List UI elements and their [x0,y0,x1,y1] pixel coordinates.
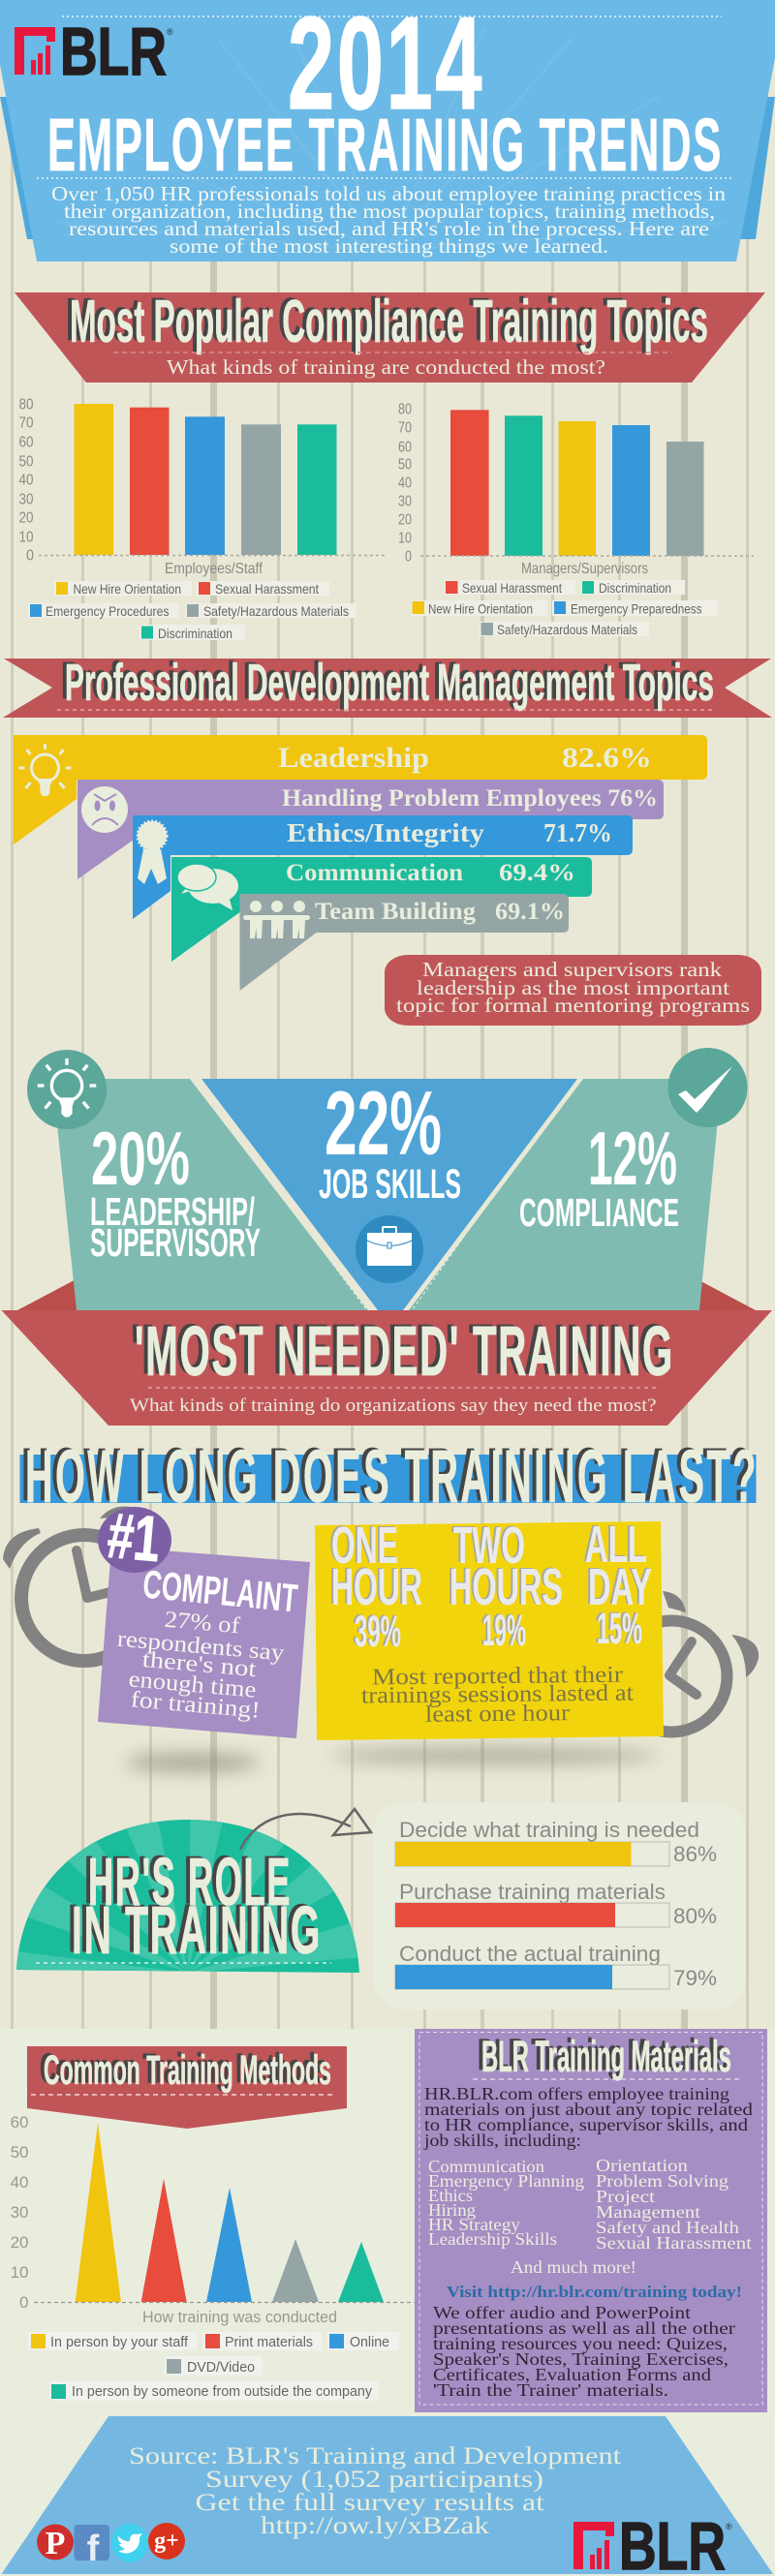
source text: Get the full survey results at [196,2490,544,2516]
legend: Print materials [225,2334,313,2350]
durations: DAY [588,1558,652,1616]
intro paragraph: some of the most interesting things we learned. [170,234,608,258]
chart: common training methods: 40 [11,2173,29,2192]
bar: decide what training is needed [395,1818,717,1866]
bar: purchase training materials [395,1880,717,1928]
ribbon: most needed heading [2,1310,772,1426]
bar chart: managers/supervisors [398,401,754,637]
bar chart: managers/supervisors: 80 [398,401,412,418]
complaint text: enough time [128,1667,257,1703]
bar: purchase training materials: Purchase training materials [399,1880,666,1904]
icon: pinterest [37,2524,74,2561]
topics list: left [428,2157,584,2249]
intro paragraph: job skills, including: [423,2131,581,2150]
bar chart: managers/supervisors: Managers/Supervisors [521,561,648,577]
logo: BLR [15,14,173,89]
ribbon: communication: 69.4% [499,860,575,886]
bar chart: employees/staff [19,397,388,641]
durations: HOURS [450,1558,563,1616]
resources paragraph: 'Train the Trainer' materials. [433,2380,668,2400]
legend [411,580,718,637]
durations: ONE [331,1517,398,1575]
ribbon: communication [171,857,592,962]
durations: 39% [355,1607,401,1656]
intro paragraph: their organization, including the most popular topics, training methods, [64,199,715,223]
legend: Online [350,2334,389,2350]
ribbon: ethics/integrity: 71.7% [543,818,612,847]
duration note [361,1663,634,1728]
chart: common training methods: 60 [11,2113,29,2131]
panel: stepped topic ribbons [14,735,707,991]
legend [28,2332,399,2401]
ribbon: leadership [14,735,707,844]
heading: complaint: COMPLAINT [141,1562,299,1621]
bar chart: managers/supervisors: 60 [398,440,412,455]
bar: decide what training is needed: 86% [673,1842,717,1866]
ribbon: leadership: 82.6% [562,742,652,774]
callout: managers and supervisors: Managers and supervisors rank [422,958,723,981]
topics list: right: Problem Solving [596,2171,728,2191]
banner: common training methods [27,2046,347,2129]
bar chart: managers/supervisors: 50 [398,457,412,473]
legend: Safety/Hazardous Materials [203,603,349,619]
shadows below cards [125,1748,659,1772]
bar chart: managers/supervisors: 20 [398,511,412,529]
resources paragraph: presentations as well as all the other [433,2318,735,2338]
legend [28,581,356,641]
bar chart: employees/staff: 30 [19,492,34,507]
topics list: right: Sexual Harassment [596,2233,752,2253]
chart: common training methods: 30 [11,2203,29,2222]
ribbon: leadership: Leadership [278,742,429,774]
chart: common training methods: How training was conducted [142,2308,337,2326]
complaint text: respondents say [116,1627,285,1667]
bar chart: employees/staff: 0 [26,548,34,564]
complaint text [116,1608,285,1724]
durations: 19% [482,1606,526,1655]
intro paragraph: materials on just about any topic related [424,2100,753,2119]
icon: angry face [81,786,128,833]
topics list: right [596,2156,752,2253]
ribbon: handling problem employees [78,780,664,879]
bar chart: employees/staff: 60 [19,434,34,451]
topics list: right: Project [596,2187,655,2206]
duration note: Most reported that their [372,1663,623,1690]
bar chart: managers/supervisors: 30 [398,494,412,509]
panel: training duration card [315,1516,664,1740]
topics list: left: Leadership Skills [428,2229,557,2249]
duration note: trainings sessions lasted at [361,1681,634,1708]
logo: BLR [574,2508,732,2576]
badge: #1: #1 [105,1499,163,1575]
bar chart: managers/supervisors: 10 [398,531,412,546]
icon: team of people [243,901,310,938]
legend: Emergency Preparedness [571,600,701,616]
legend: DVD/Video [187,2359,255,2376]
segment: job skills [202,1072,577,1310]
intro paragraph: HR.BLR.com offers employee training [424,2084,729,2103]
segment: leadership/supervisory: LEADERSHIP/ [90,1189,255,1234]
bar chart: managers/supervisors: 40 [398,475,412,492]
segment: leadership/supervisory [27,1050,378,1310]
bar chart: employees/staff: 10 [19,529,34,546]
heading: HR's role in training [72,1844,322,1968]
icon: right alarm clock [616,1591,759,1732]
callout: managers and supervisors [385,955,761,1026]
header banner [0,0,775,261]
complaint text: 27% of [164,1608,241,1639]
bar chart: employees/staff: 20 [19,509,34,527]
topics list: right: Safety and Health [596,2218,739,2237]
logo: BLR: BLR [60,14,167,89]
resources paragraph: training resources you need: Quizes, [433,2334,728,2353]
bar: purchase training materials: 80% [673,1904,717,1928]
arrow: to HR role bars [240,1809,371,1850]
durations: TWO [453,1517,525,1575]
bar chart: employees/staff: 40 [19,473,34,488]
legend: Sexual Harassment [215,581,319,597]
legend: Discrimination [599,580,671,596]
intro paragraph [423,2084,753,2150]
legend: Discrimination [158,626,232,641]
bar chart: managers/supervisors: 70 [398,420,412,436]
ribbon: ethics/integrity [133,815,633,919]
visit link: Visit http://hr.blr.com/training today! [447,2283,742,2301]
legend: Safety/Hazardous Materials [497,622,637,637]
panel: number one complaint card [98,1499,310,1738]
logo: BLR: ® [726,2522,732,2531]
topics list: left: Communication [428,2157,544,2176]
panel: professional development banner [3,654,772,718]
complaint text: for training! [130,1687,261,1724]
panel: BLR training materials [415,2029,767,2412]
durations: HOUR [331,1558,422,1616]
bar: decide what training is needed: Decide what training is needed [399,1818,699,1842]
durations [331,1516,652,1656]
panel: HR role progress bars [373,1802,746,2009]
ribbon: team building [240,894,569,991]
segment: leadership/supervisory: 20% [91,1116,190,1201]
heading: HR's role in training: HR'S ROLE [88,1844,292,1919]
duration note: least one hour [425,1701,570,1728]
and much more: And much more! [511,2257,636,2277]
source text: Survey (1,052 participants) [205,2467,543,2493]
segment: compliance [403,1048,748,1310]
bar: conduct the actual training [395,1942,717,1990]
durations: ALL [585,1516,647,1574]
icon: left alarm clock [3,1507,147,1661]
icon: speech bubbles [177,864,238,910]
legend: Emergency Procedures [46,603,169,619]
intro paragraph [51,182,727,258]
icon: briefcase [367,1227,412,1266]
ribbon back folds [17,1280,756,1310]
heading: HR's role in training: IN TRAINING [72,1892,322,1968]
source text [129,2443,621,2539]
icon: facebook: f [87,2529,100,2569]
icon: light bulb [38,1058,96,1117]
banner: common training methods: Common Training Methods [44,2047,331,2094]
durations: 15% [597,1604,642,1653]
panel: HR's role dome [16,1820,359,1973]
chart: common training methods: 50 [11,2143,29,2162]
bar: conduct the actual training: Conduct the actual training [399,1942,661,1966]
ribbon: handling problem employees: Handling Problem Employees 76% [282,785,658,812]
ribbon: ethics/integrity: Ethics/Integrity [287,818,485,847]
panel: most popular compliance training topics banner [15,289,765,383]
chart: common training methods: 20 [11,2233,29,2252]
legend: Sexual Harassment [462,580,562,596]
resources paragraph: Speaker's Notes, Training Exercises, [433,2349,728,2369]
intro paragraph: resources and materials used, and HR's role in the process. Here are [69,217,709,240]
icon: facebook [74,2525,109,2569]
icon: light bulb [19,744,72,796]
segment: leadership/supervisory: SUPERVISORY [90,1220,261,1265]
icon: check mark [678,1066,732,1113]
bar chart: employees/staff: 70 [19,414,34,432]
bar chart: employees/staff: Employees/Staff [165,561,263,577]
resources paragraph [433,2303,735,2400]
chart: common training methods: 10 [11,2263,29,2282]
legend: In person by someone from outside the company [72,2383,372,2400]
topics list: left: Emergency Planning [428,2171,584,2191]
topics list: left: Hiring [428,2200,476,2220]
segment: job skills: JOB SKILLS [319,1161,461,1208]
topics list: left: HR Strategy [428,2215,520,2234]
icon: twitter [111,2524,148,2562]
legend: In person by your staff [50,2334,189,2350]
segment: job skills: 22% [325,1072,442,1174]
source text: http://ow.ly/xBZak [261,2513,490,2539]
intro paragraph: Over 1,050 HR professionals told us about employee training practices in [51,182,727,205]
topics list: right: Orientation [596,2156,688,2175]
segment: compliance: 12% [588,1116,677,1201]
ribbon: communication: Communication [286,860,463,886]
bar chart: managers/supervisors: 0 [405,548,412,566]
ribbon: team building: Team Building [315,899,477,925]
chart: common training methods [11,2113,415,2401]
panel: footer source [2,2416,773,2576]
bar chart: employees/staff: 50 [19,453,34,471]
callout: managers and supervisors: leadership as the most important [417,976,729,999]
resources paragraph: We offer audio and PowerPoint [433,2303,691,2322]
chart: common training methods: 0 [19,2293,29,2312]
icon: google plus [148,2523,185,2560]
intro paragraph: to HR compliance, supervisor skills, and [424,2115,748,2134]
complaint text: there's not [141,1647,258,1682]
ribbon: most needed heading: What kinds of training do organizations say they need the most? [130,1395,657,1416]
legend: New Hire Orientation [428,600,533,616]
icon: google plus: g+ [154,2529,179,2554]
callout: managers and supervisors: topic for formal mentoring programs [396,994,750,1017]
topics list: left: Ethics [428,2186,473,2205]
icon: award rosette [138,821,167,884]
ribbon: team building: 69.1% [495,899,565,925]
logo: BLR: ® [167,27,173,37]
icon: pinterest: P [46,2526,65,2561]
bar chart: employees/staff: 80 [19,397,34,413]
subtitle: What kinds of training are conducted the most? [167,355,605,379]
source text: Source: BLR's Training and Development [129,2443,621,2469]
resources paragraph: Certificates, Evaluation Forms and [433,2365,711,2384]
bar: conduct the actual training: 79% [673,1966,717,1990]
panel: most needed training [2,1048,772,1426]
topics list: right: Management [596,2202,700,2222]
legend: New Hire Orientation [74,581,181,597]
